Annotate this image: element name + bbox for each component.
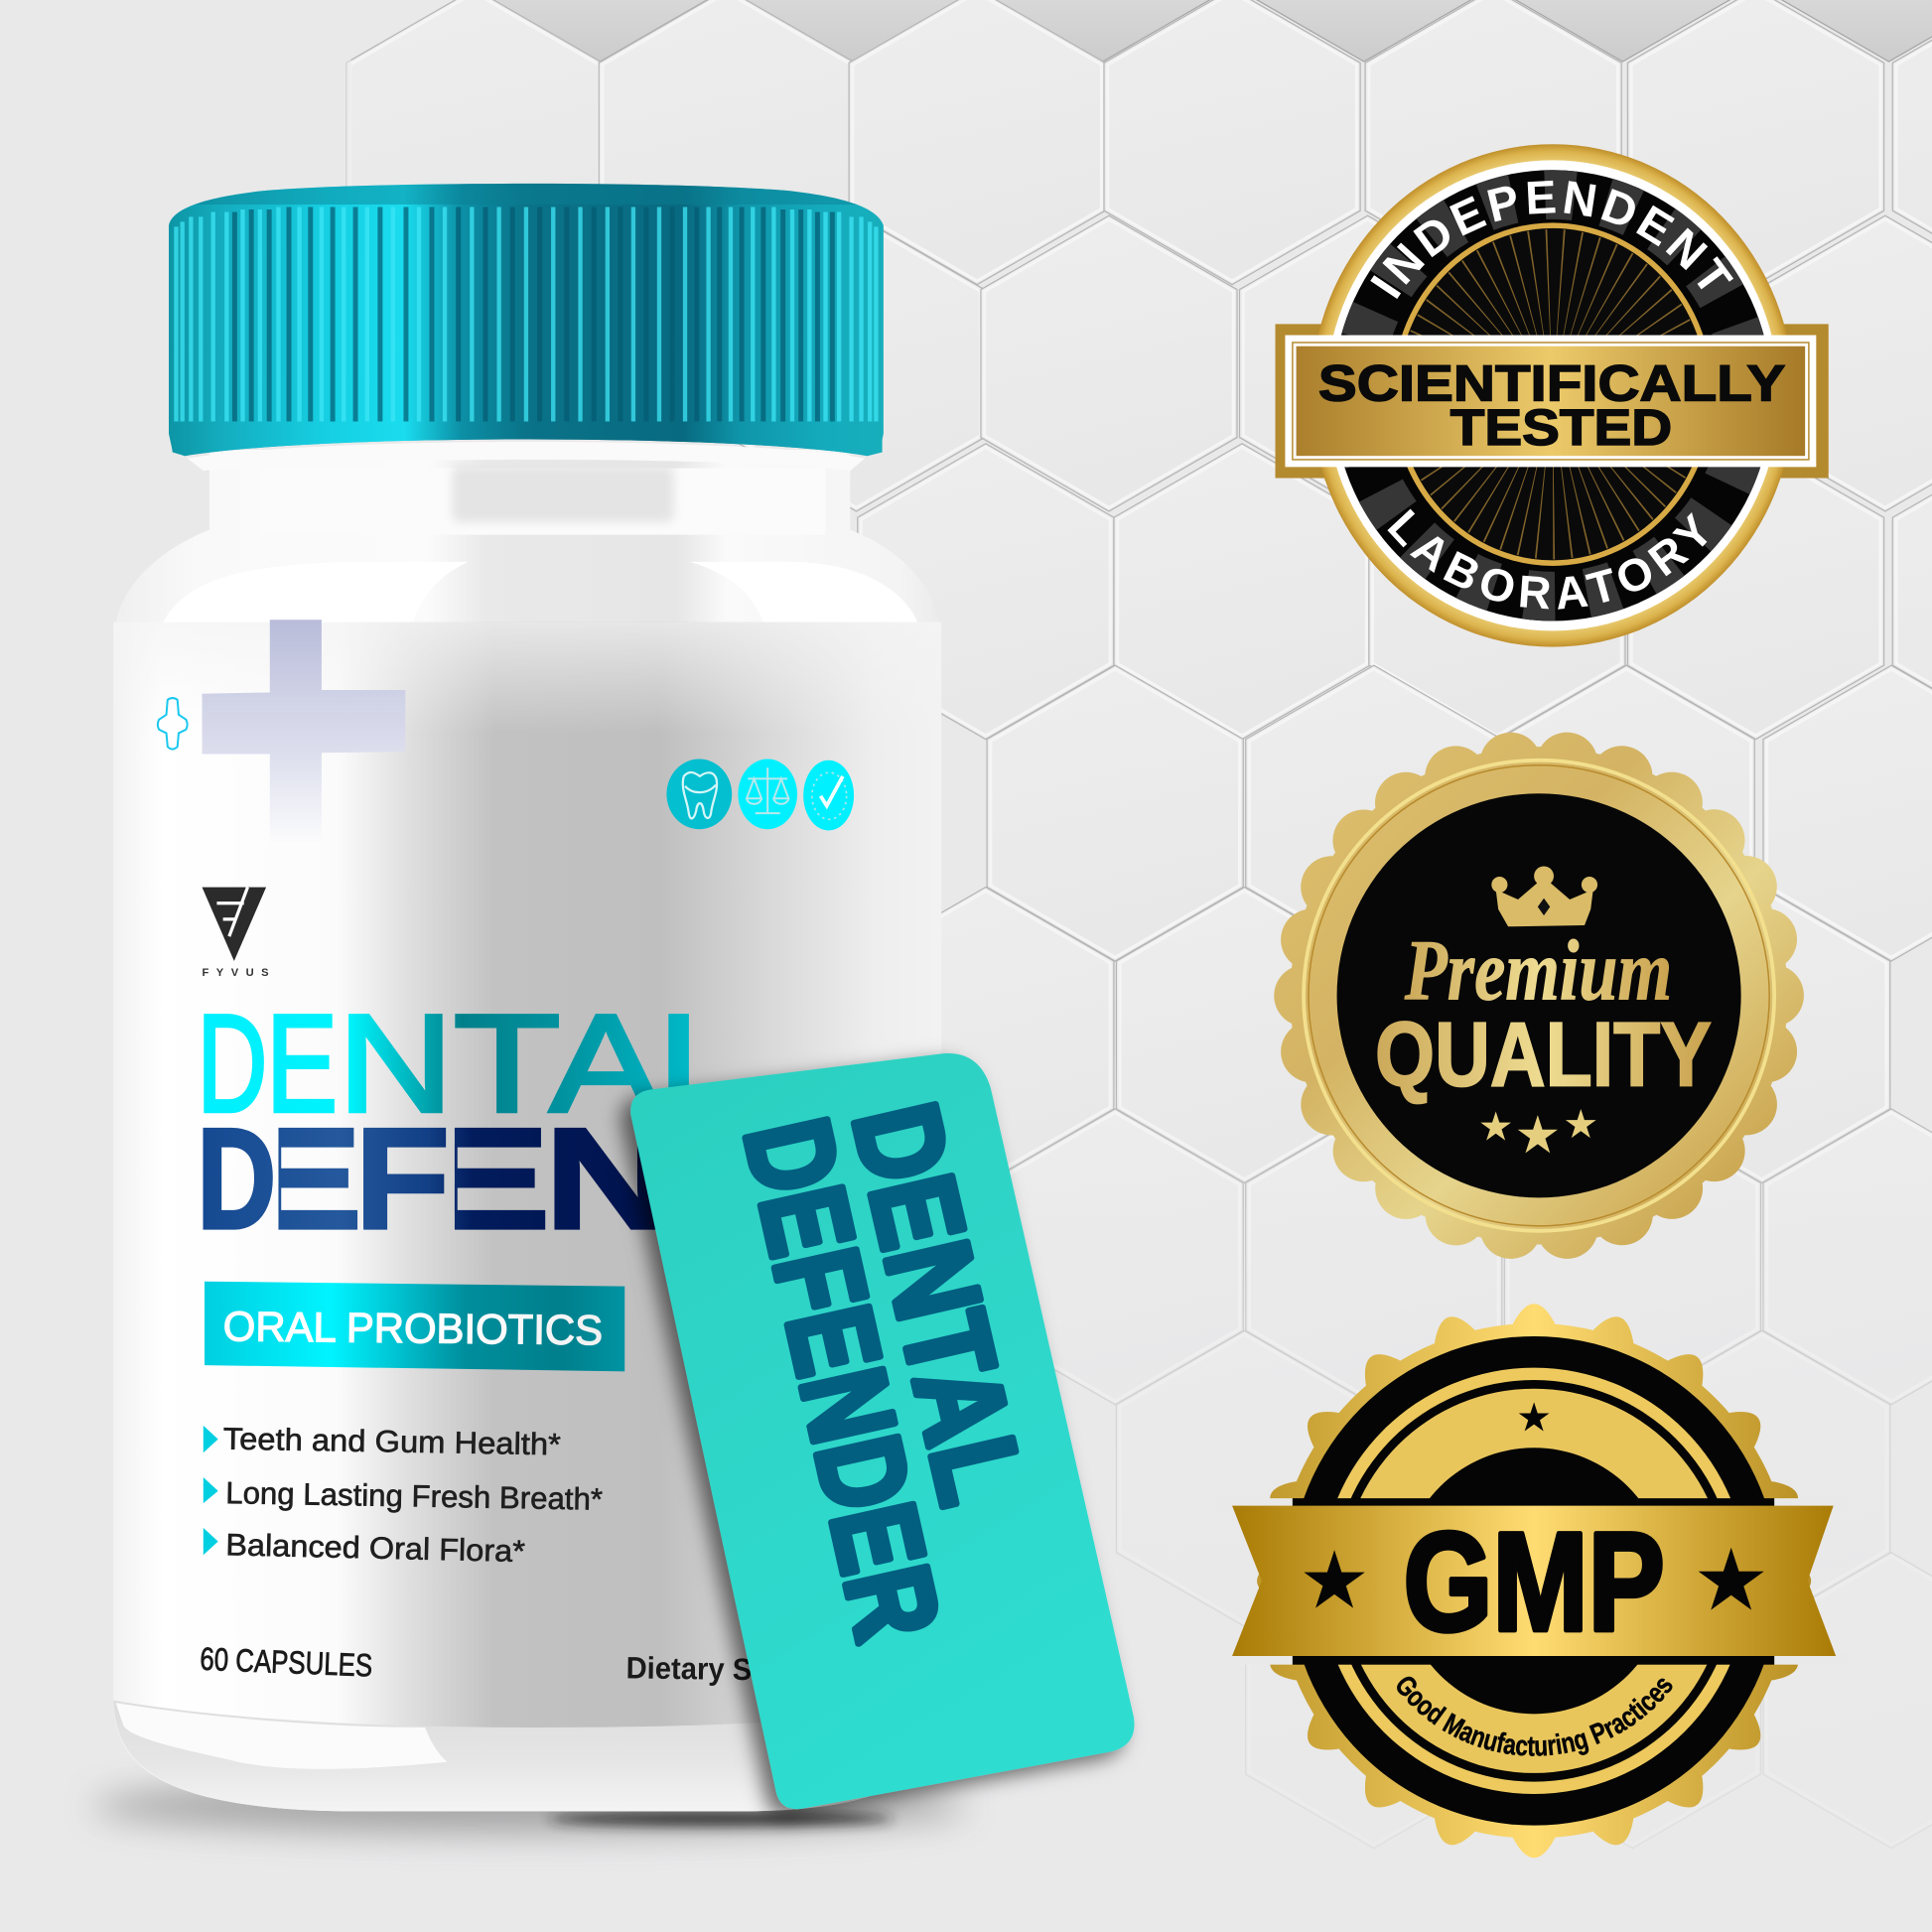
bottle cap: [169, 180, 884, 456]
white band: [1285, 336, 1816, 467]
premium: Premium: [1404, 923, 1672, 1019]
product name: DEFENDER: [203, 1128, 655, 1230]
rings: [1290, 1336, 1778, 1826]
capsule count: 60 CAPSULES: [200, 1641, 373, 1684]
three stars: [1480, 1109, 1596, 1153]
icon: scales: [738, 759, 797, 829]
cap ribs: highlights: [176, 207, 876, 421]
brand logo: FYVUS: [203, 967, 269, 979]
product name: DEFENDER: N: [541, 1099, 676, 1259]
card title: DEFENDER: DEFENDER: [719, 1107, 966, 1651]
scientifically: SCIENTIFICALLY: [1318, 354, 1785, 411]
gold plate: [1297, 346, 1805, 456]
product name: DENTAL: N: [338, 985, 454, 1141]
supplement descriptor: Dietary S: [625, 1650, 752, 1687]
starburst seal: [1257, 1304, 1811, 1858]
benefit 3: Balanced Oral Flora*: [225, 1527, 525, 1569]
icon: crown: [1491, 866, 1597, 926]
scalloped seal: [1290, 747, 1788, 1244]
benefit 2: Long Lasting Fresh Breath*: [225, 1475, 603, 1517]
ribbon gaps: [1220, 1498, 1849, 1665]
gold ribbon: [1232, 1506, 1836, 1656]
teal card: [630, 1053, 1134, 1809]
product name: DEFENDER: E: [410, 1099, 551, 1259]
large lavender cross: [203, 620, 405, 845]
badge: scientifically tested: [1275, 144, 1829, 647]
GMP lettering: GMP: [1404, 1503, 1665, 1660]
product name: DEFENDER: E: [240, 1099, 362, 1259]
product name: DENTAL: D: [198, 985, 267, 1141]
neck highlight: [163, 466, 918, 623]
card title: DENTAL: DENTAL: [827, 1092, 1050, 1516]
curved text: laboratory: LABORATORY: [1388, 508, 1708, 610]
neck ring: [188, 442, 865, 471]
gold oval frame: [1311, 144, 1794, 647]
benefit list: [204, 1422, 603, 1569]
label top fade: [113, 622, 941, 733]
curved text: good manufacturing practices: Good Manufacturing Practices: [1397, 1676, 1672, 1756]
brand logo: [203, 888, 269, 979]
product name: DENTAL: L: [656, 985, 752, 1141]
supplement bottle: [113, 180, 941, 1811]
benefit 1: Teeth and Gum Health*: [223, 1422, 561, 1461]
badge: premium quality: [1290, 747, 1788, 1244]
band back tabs: [1276, 324, 1829, 479]
product type band: [205, 1282, 624, 1371]
ribbon and top stars: [1304, 1402, 1764, 1610]
quality: QUALITY: [1375, 1004, 1712, 1105]
label wrap with cylindrical shading: [113, 622, 941, 1727]
black centre: [1337, 793, 1741, 1197]
gold ring: [1304, 760, 1774, 1231]
product name: DEFENDER: F: [351, 1099, 450, 1259]
gold plate line: [1293, 343, 1809, 460]
small outlined cross: [158, 698, 188, 750]
ring rays: [1358, 195, 1747, 597]
bottle floor shadow: [92, 1779, 967, 1834]
sunburst: [1442, 283, 1663, 505]
benefit icons: [666, 759, 854, 830]
inner gold ring: [1395, 225, 1711, 563]
tested: TESTED: [1450, 399, 1672, 456]
bottle silhouette and shoulder: [113, 450, 941, 1811]
curved text: independent: INDEPENDENT: [1370, 181, 1733, 299]
icon: tooth: [666, 759, 732, 829]
cap ribs: grooves: [234, 207, 832, 421]
product name: DENTAL: A: [550, 985, 662, 1141]
badge: GMP: [1232, 1304, 1837, 1859]
product name: DENTAL: T: [454, 985, 561, 1141]
cap lip: [170, 422, 883, 456]
product name: DENTAL: E: [266, 985, 338, 1141]
product name: DEFENDER: D: [198, 1099, 276, 1259]
bottle foot: [113, 1694, 941, 1811]
icon: clock check: [803, 760, 854, 830]
product type band: ORAL PROBIOTICS: [223, 1303, 603, 1353]
